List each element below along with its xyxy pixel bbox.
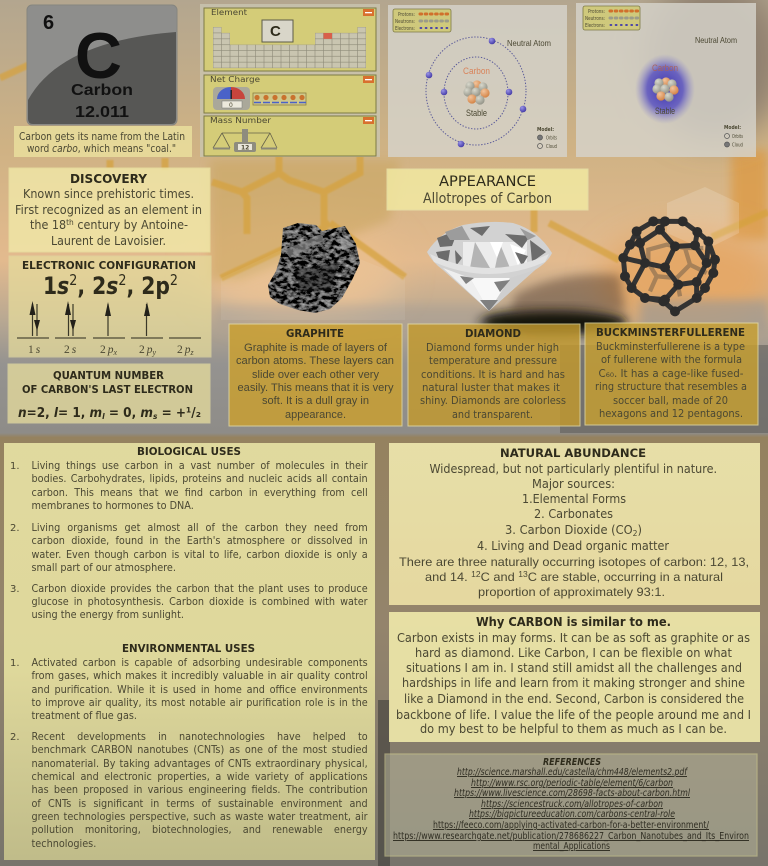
- environmental uses text: to improve air quality, its most notable air purification role is in the: [32, 696, 368, 709]
- biological uses text: carbon dioxide, found in the Earth's atmosphere or dissolved in: [32, 534, 368, 547]
- panel: why carbon is similar to me: situations I am in. I stand still amidst all the challenges and: [406, 660, 742, 675]
- panel: natural abundance: There are three naturally occurring isotopes of carbon: 12, 13,: [399, 555, 749, 569]
- biological list numbers: 1.: [10, 461, 20, 472]
- panel: why carbon is similar to me: Why CARBON is similar to me.: [476, 614, 671, 629]
- orbital diagram: 2p: [139, 344, 152, 356]
- orbital diagram: x: [112, 348, 118, 357]
- mass number sub-panel: 12: [241, 144, 249, 152]
- environmental uses text: Activated carbon is capable of adsorbing undesirable components: [32, 656, 368, 669]
- particle legend: Protons:: [588, 9, 605, 15]
- biological list numbers: [10, 461, 20, 595]
- biological uses text: Living organisms get almost all of the carbon they need from: [32, 521, 368, 534]
- panel: graphite: GRAPHITE: [286, 327, 344, 340]
- panel: electronic configuration: 2: [170, 271, 178, 289]
- panel: references: REFERENCES: [543, 757, 601, 768]
- heading: biological uses: BIOLOGICAL USES: [137, 445, 241, 458]
- panel: natural abundance: 12: [471, 570, 481, 579]
- panel: buckminsterfullerene: BUCKMINSTERFULLERENE: [596, 326, 745, 339]
- panel: natural abundance: Widespread, but not particularly plentiful in nature.: [430, 462, 717, 476]
- electron cloud: [635, 54, 695, 124]
- panel: natural abundance: 3. Carbon Dioxide (CO: [505, 523, 639, 537]
- heading: appearance: Allotropes of Carbon: [423, 191, 552, 207]
- panel: graphite: carbon atoms. These layers can: [236, 355, 394, 367]
- environmental uses text: of CNTs is significant in terms of sustainable environment and: [32, 797, 368, 810]
- biological uses text: Living things use carbon in a vast number of molecules in their: [32, 459, 368, 472]
- panel: natural abundance: and 14.: [425, 570, 465, 584]
- panel: electronic configuration: 2: [118, 271, 126, 289]
- element sub-panel: C: [270, 23, 281, 40]
- caption: name origin: word carbo, which means "coal.": [27, 143, 176, 155]
- biological uses text: using the energy from sunlight.: [32, 608, 184, 621]
- environmental uses text: chemical and electronic properties, a wide variety of applications: [32, 770, 368, 783]
- panel: graphite: appearance.: [285, 409, 346, 421]
- panel: references: https://feeco.com/applying-activated-carbon-for-a-better-environment/: [433, 820, 710, 831]
- orbital diagram: 2p: [100, 344, 114, 356]
- environmental uses text: Recent developments in nanotechnologies have helped to: [32, 730, 368, 743]
- model selector: Orbits: [546, 136, 557, 142]
- panel: diamond: natural luster that makes it: [422, 381, 561, 394]
- panel: orbit model atom: [388, 5, 567, 157]
- panel: quantum number: QUANTUM NUMBER: [53, 369, 164, 382]
- panel: diamond: [408, 324, 580, 426]
- particle legend: Neutrons:: [395, 19, 415, 25]
- model selector: [537, 127, 557, 150]
- heading: appearance: APPEARANCE: [439, 174, 536, 190]
- panel: graphite: [229, 324, 402, 426]
- heading: appearance: [387, 169, 588, 210]
- element tile: carbon: 6: [43, 12, 54, 34]
- panel: graphite: soft. It is a dull gray in: [262, 395, 369, 407]
- orbital diagram: z: [190, 348, 194, 357]
- model selector: Model:: [537, 127, 554, 133]
- element tile: carbon: [27, 5, 177, 125]
- panel: biological and environmental uses: [4, 0, 375, 866]
- panel: electronic configuration: 1s: [43, 272, 71, 300]
- model selector: Orbits: [732, 134, 743, 140]
- panel: buckminsterfullerene: soccer ball, made of 20: [613, 394, 728, 407]
- panel: buckminsterfullerene: ring structure that resembles a: [595, 380, 747, 393]
- panel: discovery: DISCOVERY: [70, 172, 147, 186]
- panel: electronic configuration: [9, 256, 211, 357]
- panel: references: http://www.rsc.org/periodic-table/element/6/carbon: [471, 778, 673, 789]
- panel: buckminsterfullerene: [585, 323, 758, 425]
- environmental uses text: [32, 0, 368, 866]
- model selector: Model:: [724, 125, 741, 131]
- panel: quantum number: = 0,: [105, 406, 140, 421]
- panel: diamond: conditions. It is hard and has: [421, 368, 565, 381]
- panel: electronic configuration: s: [106, 272, 118, 300]
- biological uses text: small part of our atmosphere.: [32, 561, 176, 574]
- orbital diagram: [17, 301, 201, 357]
- panel: references: https://sciencestruck.com/allotropes-of-carbon: [481, 799, 663, 810]
- icon: buckminsterfullerene: [618, 216, 720, 316]
- panel: natural abundance: 4. Living and Dead organic matter: [477, 539, 669, 553]
- particle legend: Protons:: [398, 12, 415, 18]
- nucleus: [652, 77, 679, 102]
- panel: diamond: DIAMOND: [465, 327, 521, 340]
- panel: why carbon is similar to me: hard as diamond. Like Carbon, I can be flexible on what: [415, 645, 732, 660]
- biological uses text: bodies. Carbohydrates, lipids, proteins and nucleic acids all contain: [32, 472, 368, 485]
- panel: discovery: [9, 168, 210, 252]
- panel: references: https://www.livescience.com/28698-facts-about-carbon.html: [454, 788, 690, 799]
- panel: natural abundance: C are stable, occurring in a natural: [528, 570, 723, 584]
- panel: references: http://science.marshall.edu/castella/chm448/elements2.pdf: [457, 767, 688, 778]
- panel: diamond: temperature and pressure: [429, 354, 557, 367]
- mass number sub-panel: Mass Number: [210, 116, 272, 125]
- panel: atom simulator element, charge, mass: [200, 4, 380, 157]
- panel: cloud model atom: Neutral Atom: [695, 35, 737, 45]
- biological uses text: water. Even though carbon is vital to life, carbon dioxide is only a: [32, 548, 368, 561]
- biological uses text: membranes to hormones to DNA.: [32, 499, 194, 512]
- panel: natural abundance: proportion of approximately 93:1.: [478, 585, 665, 599]
- panel: references: https://bigpictureeducation.com/carbons-central-role: [469, 809, 675, 820]
- panel: natural abundance: [389, 443, 760, 605]
- panel: graphite: slide over each other very: [252, 369, 380, 381]
- panel: why carbon is similar to me: [389, 612, 760, 742]
- panel: quantum number: OF CARBON'S LAST ELECTRON: [22, 383, 193, 396]
- net charge sub-panel: [204, 75, 376, 113]
- orbital diagram: 2s: [64, 344, 77, 356]
- heading: environmental uses: ENVIRONMENTAL USES: [122, 642, 255, 655]
- panel: buckminsterfullerene: C₆₀. It has a cage-like fused-: [598, 367, 744, 380]
- panel: buckminsterfullerene: of fullerene with the formula: [601, 353, 742, 366]
- environmental uses text: benchmark CARBON nanotubes (CNTs) as one of the most studied: [32, 743, 368, 756]
- panel: natural abundance: 1.Elemental Forms: [522, 492, 626, 506]
- biological uses text: glucose in photosynthesis. Carbon dioxide is combined with water: [32, 595, 368, 608]
- net charge sub-panel: Net Charge: [210, 75, 260, 84]
- panel: quantum number: n=2, l= 1, m: [18, 406, 103, 421]
- environmental uses text: from gases, which makes it incredibly valuable in air quality control: [32, 669, 368, 682]
- light hexagons: [667, 187, 739, 250]
- biological list numbers: 2.: [10, 523, 20, 534]
- panel: diamond: Diamond forms under high: [426, 341, 559, 354]
- panel: discovery: Laurent de Lavoisier.: [51, 234, 166, 248]
- particle legend: [393, 9, 451, 32]
- element sub-panel: Element: [211, 8, 247, 17]
- panel: quantum number: = +¹/₂: [157, 406, 201, 421]
- biological uses text: [32, 0, 368, 866]
- element tile: carbon: Carbon: [71, 82, 133, 99]
- model selector: [724, 125, 743, 148]
- particle legend: Electrons:: [395, 26, 415, 32]
- particle legend: Neutrons:: [585, 16, 605, 22]
- panel: cloud model atom: Stable: [655, 106, 675, 116]
- element tile: carbon: C: [75, 19, 122, 92]
- panel: electronic configuration: ELECTRONIC CONFIGURATION: [22, 259, 196, 272]
- panel: diamond: shiny. Diamonds are colorless: [420, 394, 566, 407]
- panel: natural abundance: C and: [481, 570, 518, 584]
- panel: discovery: Known since prehistoric times.: [23, 187, 194, 201]
- panel: natural abundance: Major sources:: [532, 477, 615, 491]
- environmental list numbers: [10, 658, 20, 743]
- panel: orbit model atom: Neutral Atom: [507, 38, 551, 48]
- panel: discovery: the 18: [30, 218, 69, 232]
- panel: graphite: easily. This means that it is very: [238, 382, 394, 394]
- environmental uses text: nanomaterial. By taking advantages of CNTs extraordinary physical,: [32, 757, 368, 770]
- panel: diamond: and transparent.: [452, 408, 533, 421]
- biological uses text: carbon. This means that we find carbon in everything from cell: [32, 486, 368, 499]
- environmental uses text: technologies.: [32, 837, 96, 850]
- caption: name origin: Carbon gets its name from the Latin: [19, 131, 185, 143]
- panel: graphite: Graphite is made of layers of: [244, 342, 388, 354]
- environmental uses text: and purification. While it is used in home and office environments: [32, 683, 368, 696]
- panel: references: [385, 754, 757, 856]
- panel: natural abundance: 2. Carbonates: [534, 507, 613, 521]
- panel: orbit model atom: Carbon: [463, 66, 490, 76]
- orbital diagram: y: [152, 348, 156, 357]
- biological uses text: Carbon dioxide provides the carbon that the plant uses to produce: [32, 582, 368, 595]
- orbital diagram: 1s: [28, 344, 41, 356]
- panel: references: mental_Applications: [533, 841, 610, 852]
- panel: quantum number: l: [102, 412, 105, 421]
- environmental uses text: has been proposed in various engineering fields. The contribution: [32, 783, 368, 796]
- element sub-panel: [204, 8, 376, 71]
- panel: electronic configuration: , 2: [77, 272, 106, 300]
- mass number sub-panel: [204, 116, 376, 156]
- biological list numbers: 3.: [10, 584, 20, 595]
- panel: discovery: First recognized as an element in: [15, 203, 202, 217]
- caption: name origin: [14, 126, 192, 157]
- panel: buckminsterfullerene: hexagons and 12 pentagons.: [599, 407, 743, 420]
- orbital diagram: 2p: [177, 344, 190, 356]
- environmental uses text: green technologies perspective, such as waste water treatment, air: [32, 810, 368, 823]
- panel: quantum number: m: [140, 406, 153, 421]
- model selector: Cloud: [546, 144, 557, 150]
- nucleus: [463, 80, 490, 105]
- panel: cloud model atom: [576, 3, 756, 157]
- environmental list numbers: 2.: [10, 732, 20, 743]
- panel: orbit model atom: Stable: [466, 108, 487, 118]
- panel: cloud model atom: Carbon: [652, 63, 678, 73]
- environmental list numbers: 1.: [10, 658, 20, 669]
- panel: natural abundance: NATURAL ABUNDANCE: [500, 446, 646, 460]
- panel: electronic configuration: 2: [69, 271, 77, 289]
- net charge sub-panel: 0: [229, 102, 233, 109]
- panel: natural abundance: ): [638, 523, 642, 537]
- panel: electronic configuration: , 2p: [126, 272, 170, 300]
- panel: natural abundance: 13: [518, 570, 528, 579]
- panel: natural abundance: 2: [633, 529, 638, 538]
- panel: discovery: century by Antoine-: [74, 218, 188, 232]
- particle legend: Electrons:: [585, 23, 605, 29]
- icon: diamond: [427, 222, 552, 311]
- atom orbits: [426, 37, 526, 147]
- panel: discovery: th: [66, 218, 74, 227]
- element tile: carbon: 12.011: [75, 104, 129, 121]
- environmental uses text: treatment of flue gas.: [32, 709, 137, 722]
- icon: graphite rock: [268, 223, 360, 313]
- model selector: Cloud: [732, 142, 743, 148]
- hexagon lines: [0, 62, 768, 278]
- panel: quantum number: [8, 364, 210, 423]
- environmental uses text: pollution monitoring, biotechnologies, and renewable energy: [32, 823, 368, 836]
- panel: quantum number: s: [153, 412, 158, 421]
- panel: why carbon is similar to me: do my best to be helpful to them as much as I can be.: [420, 721, 727, 736]
- particle legend: [583, 6, 640, 30]
- panel: buckminsterfullerene: Buckminsterfullerene is a type: [596, 340, 745, 353]
